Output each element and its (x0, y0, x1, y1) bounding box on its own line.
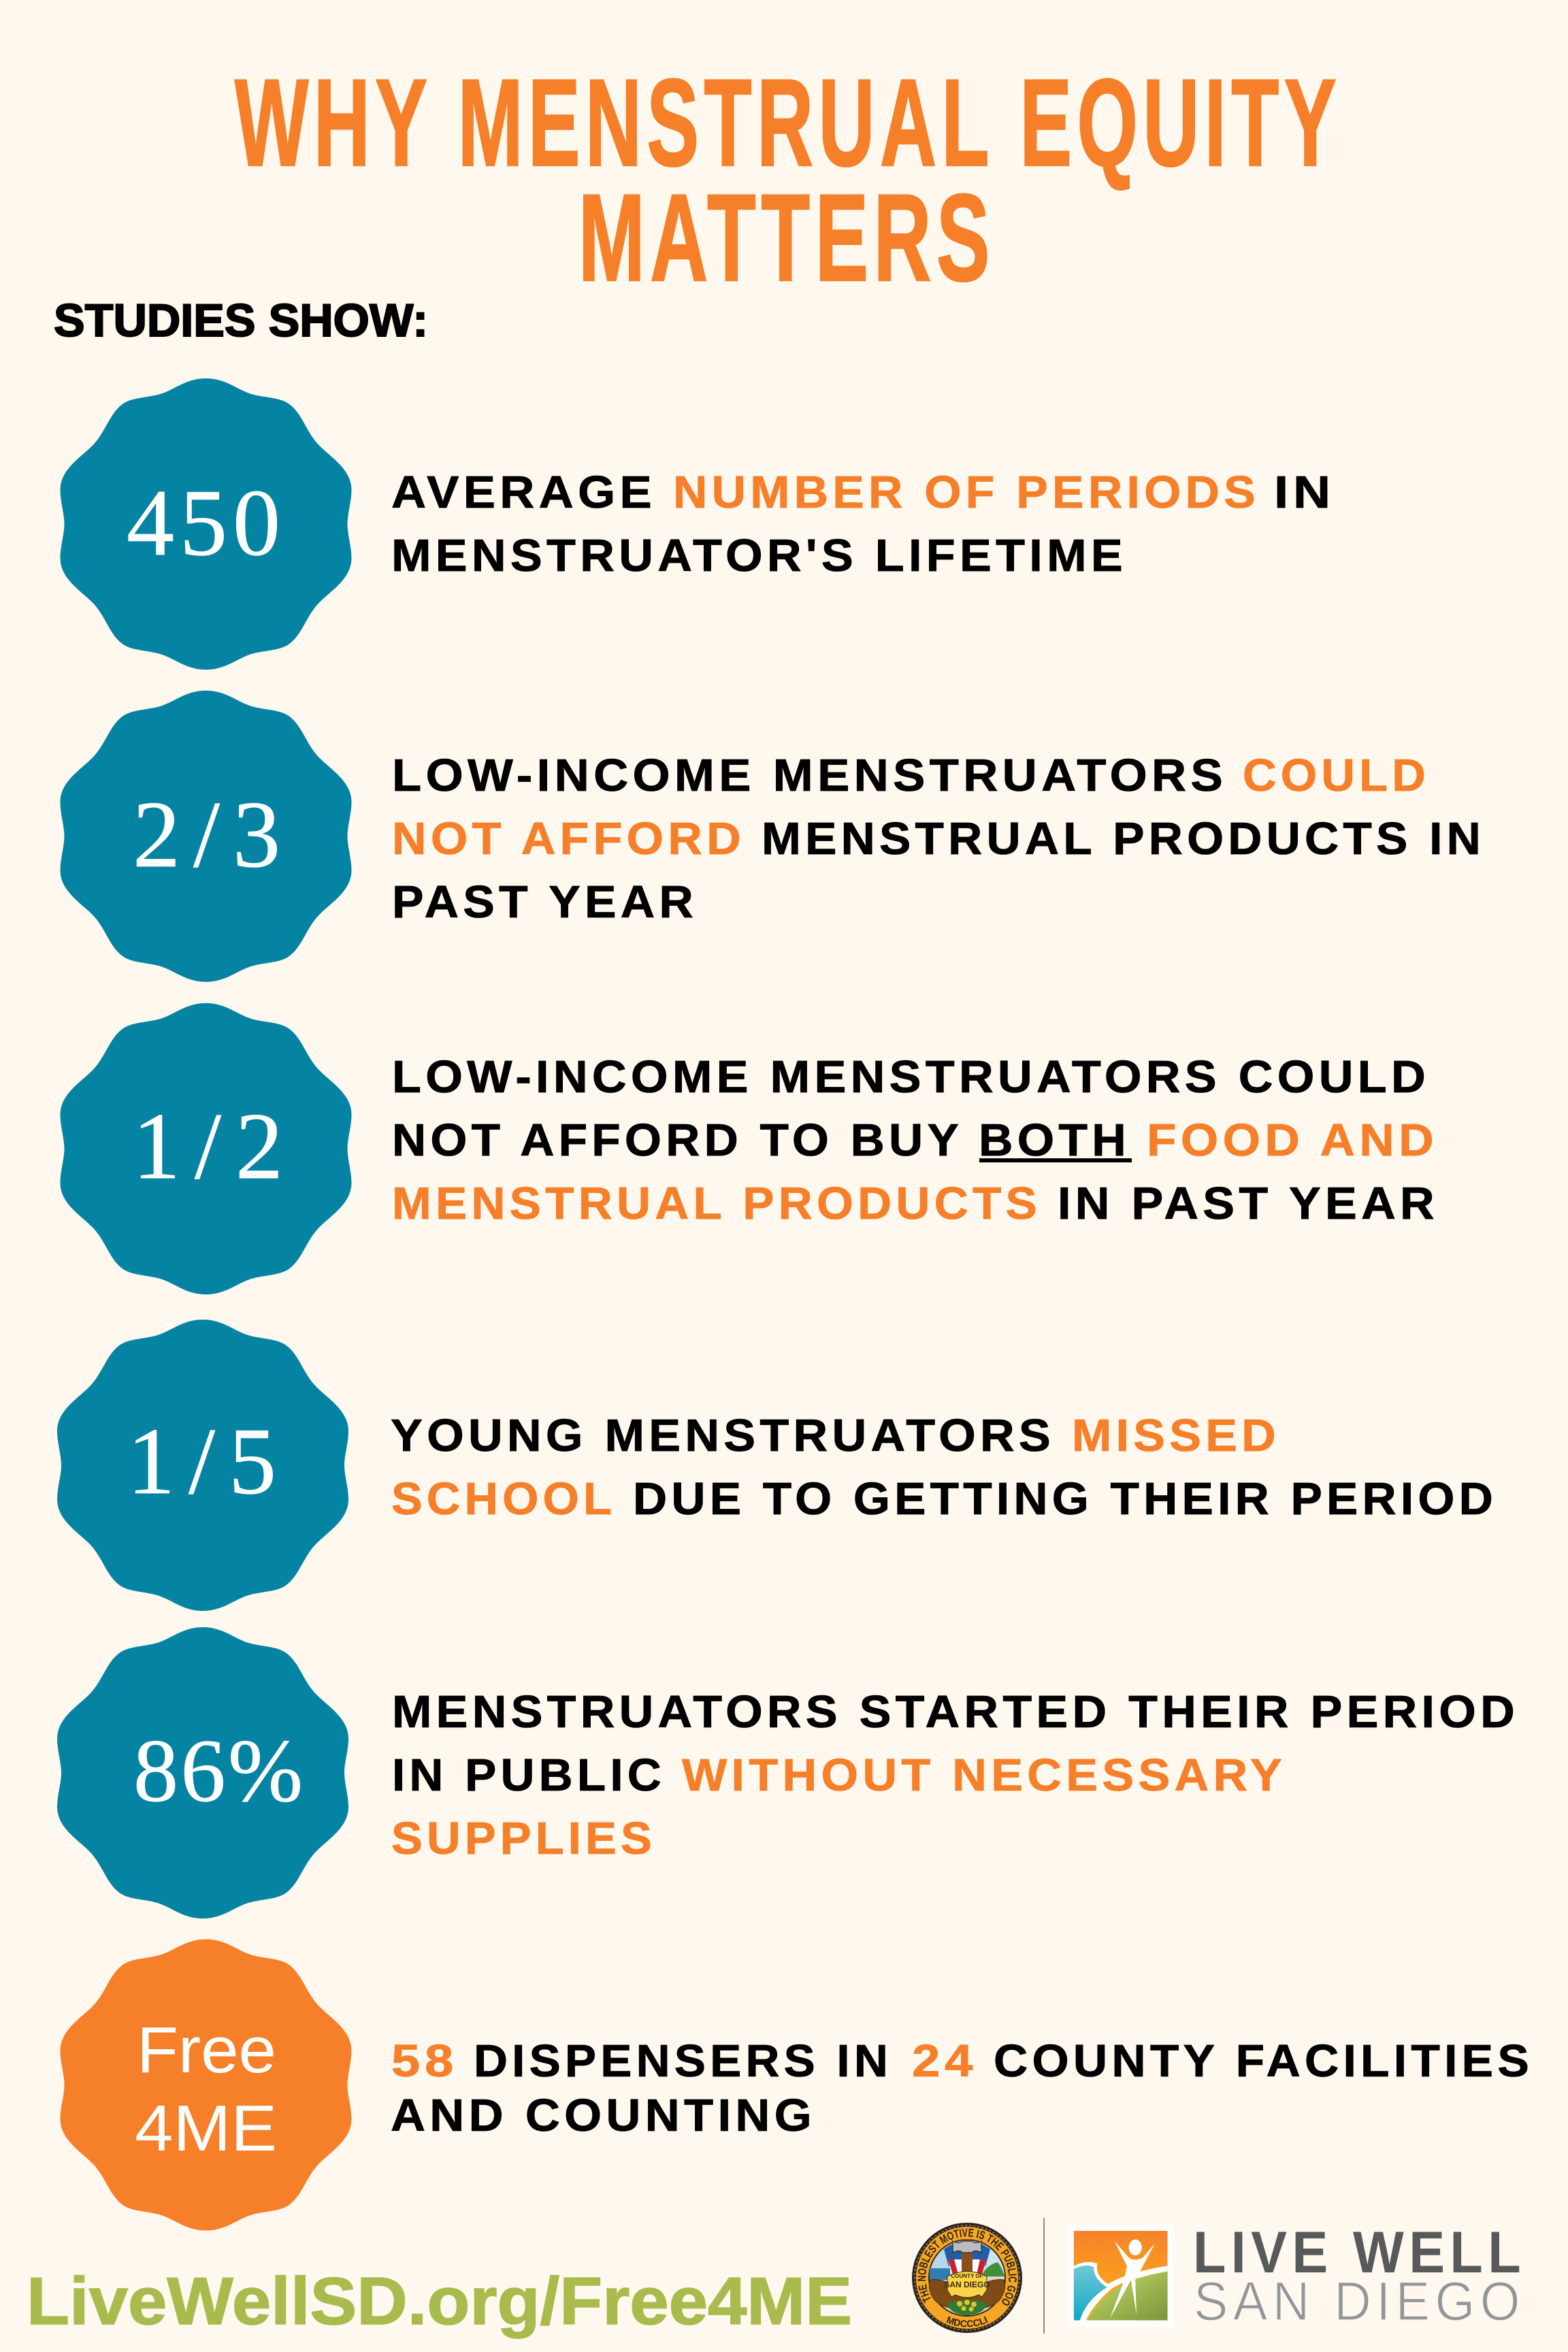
text: number of periods: NUMBER OF PERIODS (673, 467, 1260, 518)
text: missed school: SCHOOL (391, 1473, 616, 1524)
text: food and products: NOT AFFORD TO BUY (392, 1115, 963, 1166)
stat row: 1/2 (60, 1003, 1439, 1294)
text: could not afford: PAST YEAR (392, 877, 698, 928)
text: food and products: LOW-INCOME MENSTRUATORS COULD (392, 1051, 1430, 1102)
text: could not afford: LOW-INCOME MENSTRUATORS (392, 750, 1227, 801)
heading: studies show: STUDIES SHOW: (54, 295, 428, 346)
badge: 1/2 (60, 1003, 351, 1294)
badge: Free 4ME: 4ME (135, 2092, 277, 2165)
text: without necessary supplies: IN PUBLIC (392, 1750, 666, 1801)
badge: Free 4ME: Free (137, 2014, 276, 2087)
text: number of periods: IN (1274, 467, 1335, 518)
badge: 86% (57, 1627, 348, 1918)
text: missed school (391, 1410, 1497, 1524)
title: MATTERS (578, 168, 995, 307)
text: missed school: YOUNG MENSTRUATORS (391, 1410, 1055, 1461)
text: missed school: DUE TO GETTING THEIR PERIOD (633, 1473, 1497, 1524)
badge: 1/2: 1/2 (133, 1094, 283, 1199)
icon: county seal: MDCCCLI (946, 2317, 988, 2328)
text: could not afford: NOT AFFORD (392, 813, 745, 864)
text: dispensers: AND COUNTING (391, 2090, 816, 2141)
text: food and products: MENSTRUAL PRODUCTS (392, 1178, 1041, 1229)
icon: county seal: SAN DIEGO (944, 2280, 990, 2289)
badge: Free 4ME (60, 1940, 351, 2231)
stat row: 450 (60, 378, 1335, 670)
text: without necessary supplies: MENSTRUATORS STARTED THEIR PERIOD (392, 1686, 1519, 1737)
text: food and products: BOTH (979, 1115, 1130, 1166)
text: food and products: FOOD AND (1147, 1115, 1438, 1166)
text: SAN DIEGO: SAN DIEGO (1194, 2271, 1525, 2332)
stat row: 2/3 (60, 691, 1485, 982)
text: dispensers: 58 (391, 2036, 458, 2087)
text: missed school: MISSED (1072, 1410, 1280, 1461)
text: food and products (392, 1051, 1439, 1229)
badge: 450 (60, 378, 351, 670)
badge: 2/3 (60, 691, 351, 982)
text: LIVE WELL: LIVE WELL (1193, 2220, 1526, 2285)
badge: 450: 450 (127, 470, 280, 576)
badge: 1/5: 1/5 (127, 1409, 276, 1514)
icon: county seal (912, 2223, 1022, 2333)
text: without necessary supplies: SUPPLIES (391, 1813, 656, 1864)
icon: county seal: THE NOBLEST MOTIVE IS THE PUBLIC GOOD (917, 2228, 1017, 2306)
badge: 86%: 86% (133, 1720, 303, 1820)
text: dispensers: 24 (912, 2036, 977, 2087)
text: could not afford (392, 750, 1485, 928)
badge: 1/5 (57, 1320, 348, 1611)
icon: county seal: COUNTY OF (951, 2273, 983, 2279)
title (235, 53, 1341, 307)
text: number of periods (391, 467, 1335, 581)
text: dispensers (391, 2036, 1533, 2141)
website link: LiveWellSD.org/Free4ME (27, 2264, 852, 2338)
stat row: 86% (57, 1627, 1519, 1918)
text: number of periods: MENSTRUATOR'S LIFETIME (391, 530, 1127, 581)
badge: 2/3: 2/3 (133, 782, 280, 887)
text: without necessary supplies: WITHOUT NECESSARY (682, 1750, 1286, 1801)
icon: Live Well figure mark (1068, 2225, 1174, 2327)
text: could not afford: MENSTRUAL PRODUCTS IN (762, 813, 1485, 864)
text: without necessary supplies (391, 1686, 1519, 1864)
text: dispensers: COUNTY FACILITIES (994, 2036, 1533, 2087)
logo: Live Well San Diego (1068, 2220, 1526, 2332)
stat row: Free4ME (60, 1940, 1533, 2231)
text: could not afford: COULD (1243, 750, 1430, 801)
text: dispensers: DISPENSERS IN (474, 2036, 892, 2087)
text: number of periods: AVERAGE (391, 467, 656, 518)
text: food and products: IN PAST YEAR (1058, 1178, 1439, 1229)
stat row: 1/5 (57, 1320, 1497, 1611)
